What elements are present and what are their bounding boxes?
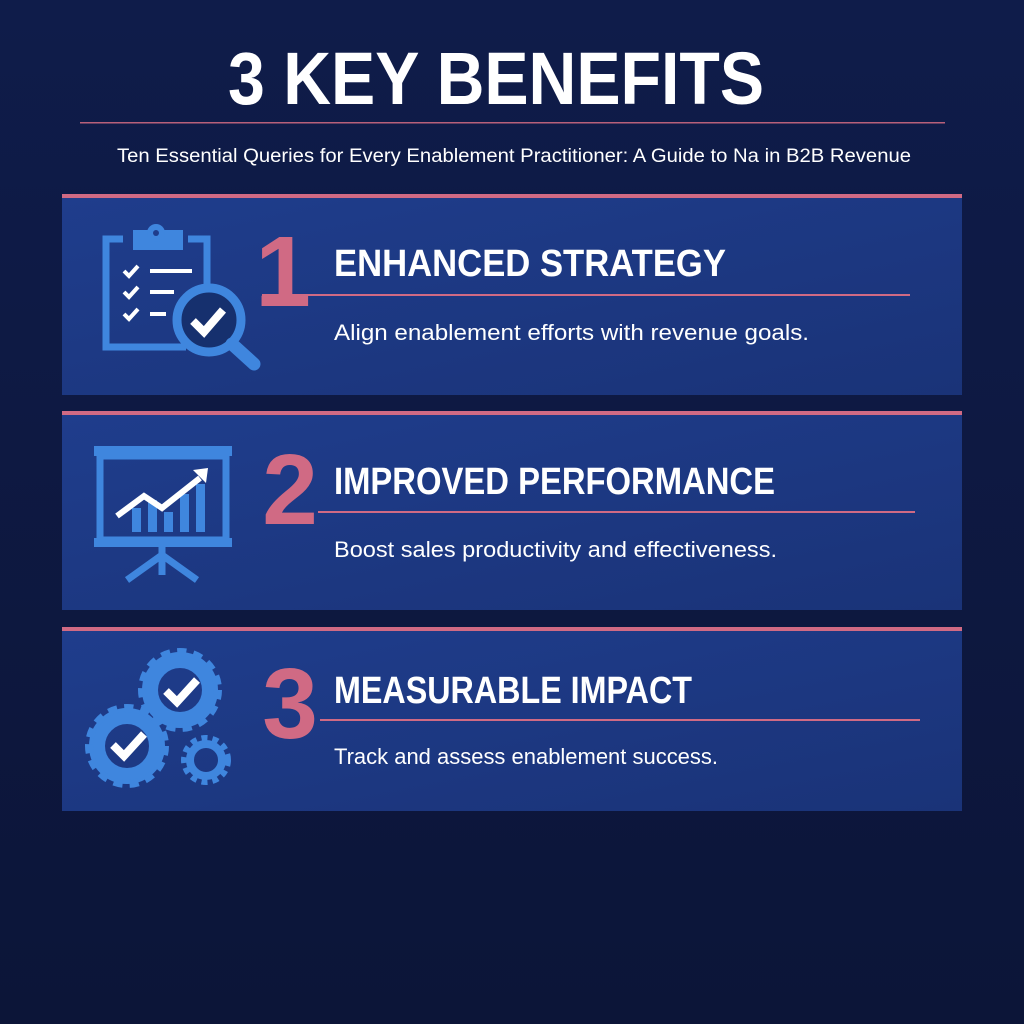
heading: ENHANCED STRATEGY bbox=[334, 243, 726, 285]
icon: gears bbox=[89, 652, 228, 784]
title: 3 KEY BENEFITS bbox=[228, 37, 764, 120]
heading: IMPROVED PERFORMANCE bbox=[334, 461, 775, 503]
description: Boost sales productivity and effectiveness. bbox=[334, 537, 777, 562]
panel: measurable impact bbox=[62, 627, 962, 811]
panel: improved performance bbox=[62, 411, 962, 610]
subtitle: Ten Essential Queries for Every Enablement Practitioner: A Guide to Na in B2B Revenue bbox=[117, 146, 911, 167]
heading: MEASURABLE IMPACT bbox=[334, 670, 692, 712]
icon: clipboard with magnifier bbox=[106, 224, 254, 364]
description: Track and assess enablement success. bbox=[334, 744, 718, 769]
number 3: 3 bbox=[262, 648, 318, 760]
icon: presentation chart bbox=[94, 446, 232, 580]
number 1: 1 bbox=[255, 216, 311, 328]
number 2: 2 bbox=[262, 434, 318, 546]
panel: enhanced strategy bbox=[62, 194, 962, 395]
description: Align enablement efforts with revenue goals. bbox=[334, 320, 809, 345]
